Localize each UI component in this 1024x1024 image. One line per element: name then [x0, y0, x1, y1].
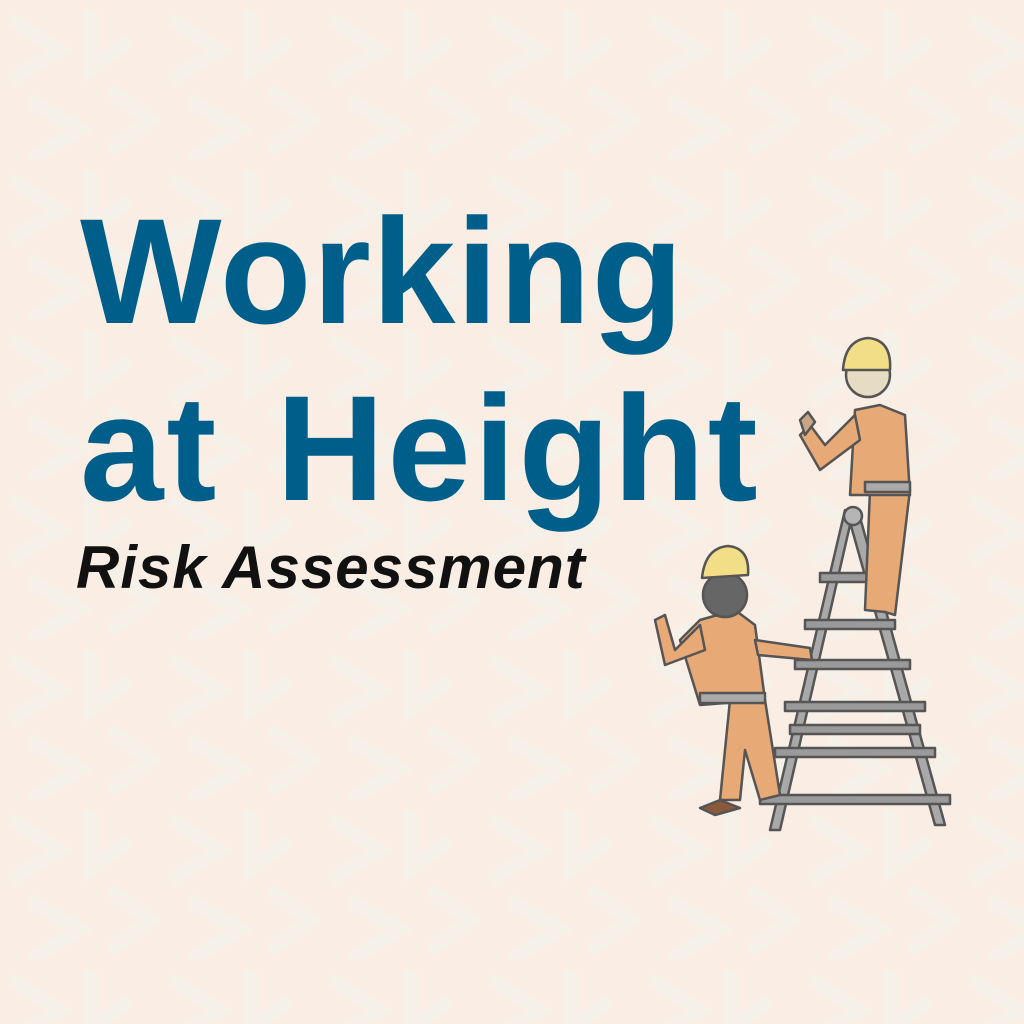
ladder — [760, 507, 950, 830]
bottom worker — [655, 546, 812, 815]
subtitle: Risk Assessment — [76, 534, 586, 601]
title line 1: Working — [80, 187, 684, 355]
title line 2: at Height — [80, 364, 761, 532]
illustration: workers on ladder — [654, 336, 952, 832]
top worker — [800, 338, 910, 615]
